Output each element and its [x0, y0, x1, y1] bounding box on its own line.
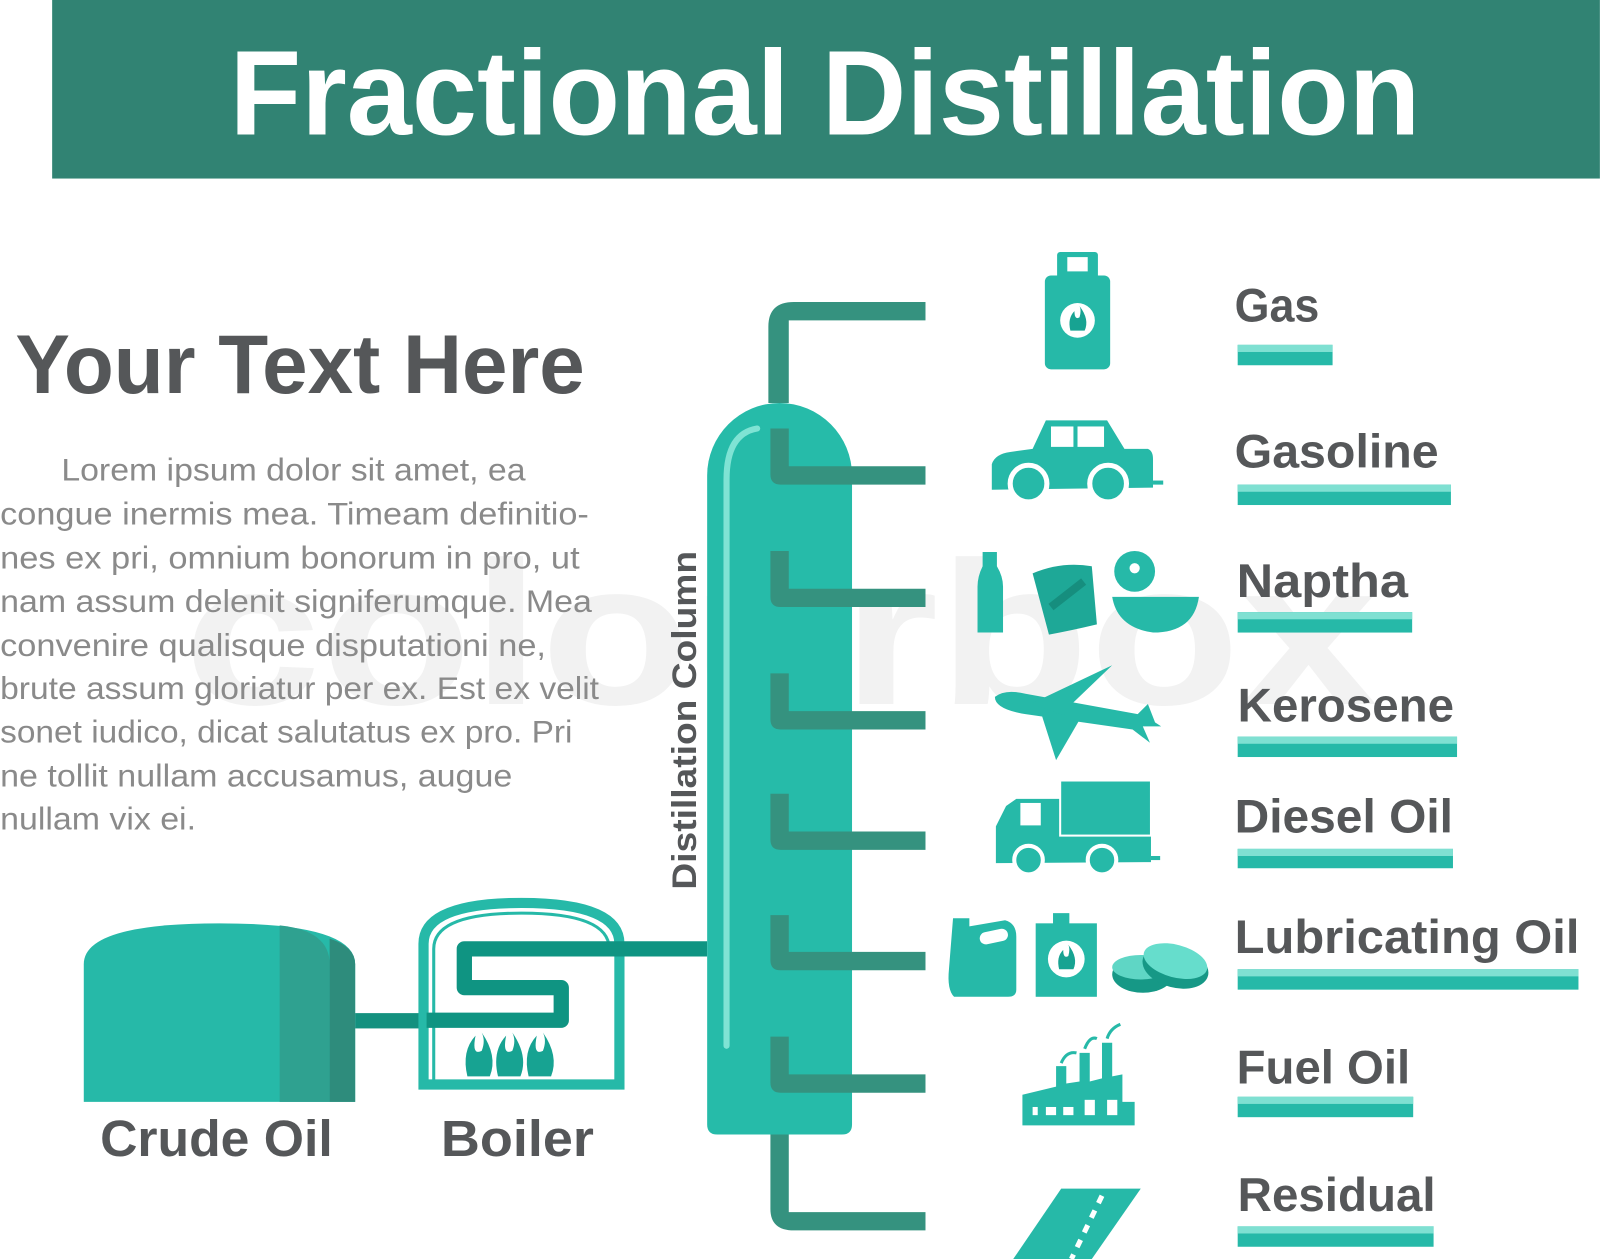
- paragraph: Lorem ipsum dolor sit amet, ea: [61, 452, 526, 488]
- label: gas: [1235, 279, 1333, 365]
- icon: airplane: [995, 665, 1161, 760]
- icon: gas cylinder: [1045, 252, 1110, 369]
- paragraph: nullam vix ei.: [0, 800, 196, 836]
- coil: [427, 949, 707, 1020]
- label: kerosene: Kerosene: [1238, 679, 1454, 731]
- paragraph: ne tollit nullam accusamus, augue: [0, 758, 512, 794]
- icon: naptha products: [978, 551, 1199, 635]
- legend labels and bars: [1235, 279, 1579, 1247]
- label: crude oil: Crude Oil: [100, 1110, 333, 1167]
- label: naptha: [1237, 555, 1412, 633]
- pipe: tank to boiler: [355, 1013, 427, 1028]
- icon: car: [992, 420, 1163, 502]
- title: Fractional Distillation: [230, 26, 1420, 161]
- paragraph: [0, 452, 599, 836]
- title banner: [52, 0, 1600, 179]
- label: residual: Residual: [1238, 1169, 1436, 1221]
- paragraph: nes ex pri, omnium bonorum in pro, ut: [0, 539, 580, 575]
- icon: road: [1013, 1189, 1141, 1259]
- icon: factory: [1022, 1024, 1135, 1125]
- label: kerosene: [1238, 679, 1457, 757]
- label: diesel oil: Diesel Oil: [1235, 791, 1453, 843]
- label: gasoline: [1235, 425, 1451, 505]
- label: fuel oil: [1237, 1042, 1413, 1117]
- label: gasoline: Gasoline: [1235, 425, 1439, 477]
- label: boiler: Boiler: [441, 1110, 594, 1167]
- label: gas: Gas: [1235, 279, 1319, 331]
- column label: Distillation Column: [666, 551, 704, 890]
- paragraph: convenire qualisque disputationi ne,: [0, 627, 546, 663]
- distillation column: [707, 403, 852, 1135]
- paragraph: nam assum delenit signiferumque. Mea: [0, 583, 592, 619]
- icon: truck: [996, 782, 1160, 874]
- heading: your text here: Your Text Here: [15, 317, 585, 411]
- crude oil tank: [84, 923, 355, 1102]
- paragraph: congue inermis mea. Timeam definitio-: [0, 495, 589, 531]
- label: naptha: Naptha: [1237, 555, 1409, 607]
- paragraph: brute assum gloriatur per ex. Est ex velit: [0, 670, 599, 706]
- pipes: [768, 302, 925, 1230]
- label: fuel oil: Fuel Oil: [1237, 1042, 1410, 1094]
- icon: lubricating oil containers: [949, 913, 1213, 997]
- label: lubricating oil: Lubricating Oil: [1235, 911, 1579, 963]
- paragraph: sonet iudico, dicat salutatus ex pro. Pri: [0, 714, 572, 750]
- label: diesel oil: [1235, 791, 1453, 868]
- label: residual: [1238, 1169, 1436, 1247]
- boiler: [424, 903, 707, 1085]
- watermark: colourbox: [184, 520, 1377, 748]
- label: lubricating oil: [1235, 911, 1579, 990]
- flames: [466, 1033, 554, 1076]
